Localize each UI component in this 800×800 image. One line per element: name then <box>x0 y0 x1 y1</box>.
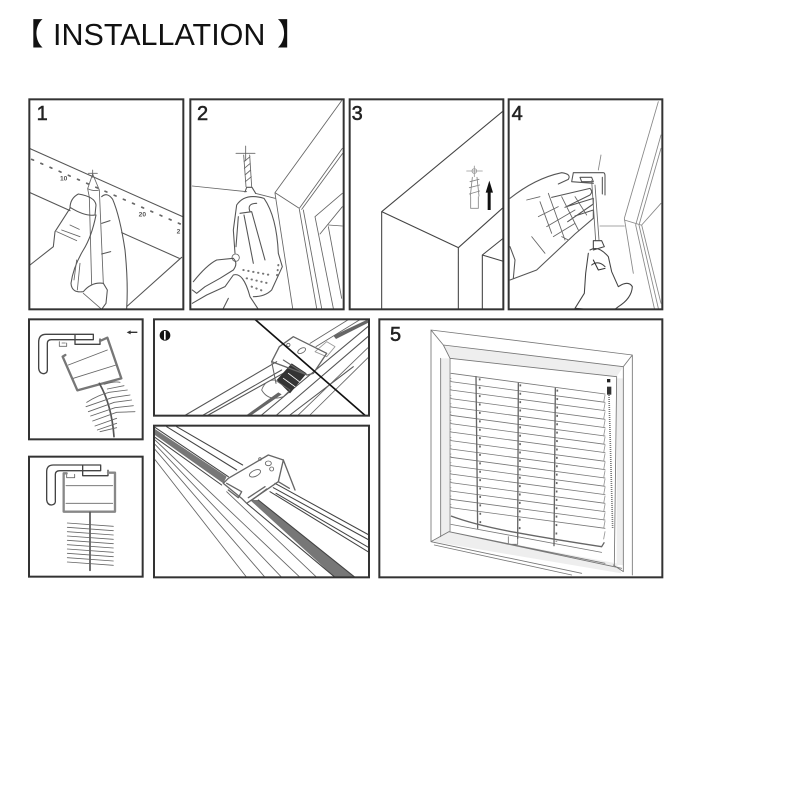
panel: clip seated on rail <box>154 426 369 577</box>
step number: 4 <box>512 103 523 125</box>
mounting clip <box>223 455 295 503</box>
frame <box>350 99 503 309</box>
panel: level headrail clip <box>29 457 143 577</box>
drill <box>232 146 282 297</box>
hand <box>192 258 258 309</box>
door frame and wall <box>192 101 343 308</box>
arrow up <box>486 181 493 210</box>
roller <box>262 363 307 398</box>
screwdriver <box>575 181 632 309</box>
rails <box>186 320 369 415</box>
frame <box>29 99 183 309</box>
mounting clip <box>272 337 327 383</box>
wall edges <box>382 112 502 309</box>
step number: 1 <box>37 103 48 125</box>
bottom rail <box>451 516 604 547</box>
arrow left <box>127 330 137 334</box>
panel: step 2 drilling <box>190 99 344 309</box>
frame <box>29 319 143 439</box>
level slats <box>67 512 113 570</box>
tilted slats <box>86 382 135 437</box>
window frame <box>598 102 661 308</box>
hand <box>510 173 593 280</box>
step number: 5 <box>390 324 401 346</box>
ruler: 10 <box>60 176 68 183</box>
window frame <box>431 330 632 575</box>
frame <box>154 319 369 416</box>
panel: step 1 marking with pencil and ruler <box>29 99 183 309</box>
title: 】 <box>277 18 308 52</box>
rails <box>154 427 369 577</box>
frame <box>379 319 662 577</box>
diagonal cut line <box>255 319 365 416</box>
panel: step 4 screwing bracket <box>509 99 662 309</box>
ruler: 20 <box>139 212 146 219</box>
frame <box>154 426 369 577</box>
anchor plug <box>467 166 482 208</box>
frame <box>29 457 143 577</box>
ruler: 2 <box>177 228 181 235</box>
bracket and headrail <box>39 334 121 390</box>
panel: step 3 wall anchor <box>350 99 503 309</box>
hand and pencil <box>30 170 182 309</box>
ladder cords <box>476 377 557 546</box>
step number: 3 <box>352 103 363 125</box>
title: 【 <box>13 18 44 52</box>
panel: tilted headrail clip <box>29 319 143 439</box>
step number: 2 <box>197 103 208 125</box>
bracket <box>572 173 605 195</box>
ruler <box>30 149 183 258</box>
panel: warning close-up of clip and rail <box>154 319 369 416</box>
frame <box>190 99 344 309</box>
bracket and headrail <box>47 465 115 512</box>
warning icon <box>160 330 170 341</box>
panel: step 5 finished blind in window <box>379 319 662 577</box>
slats <box>450 373 605 552</box>
title: INSTALLATION <box>53 18 265 52</box>
frame <box>509 99 662 309</box>
tilt cord and controls <box>607 379 613 528</box>
